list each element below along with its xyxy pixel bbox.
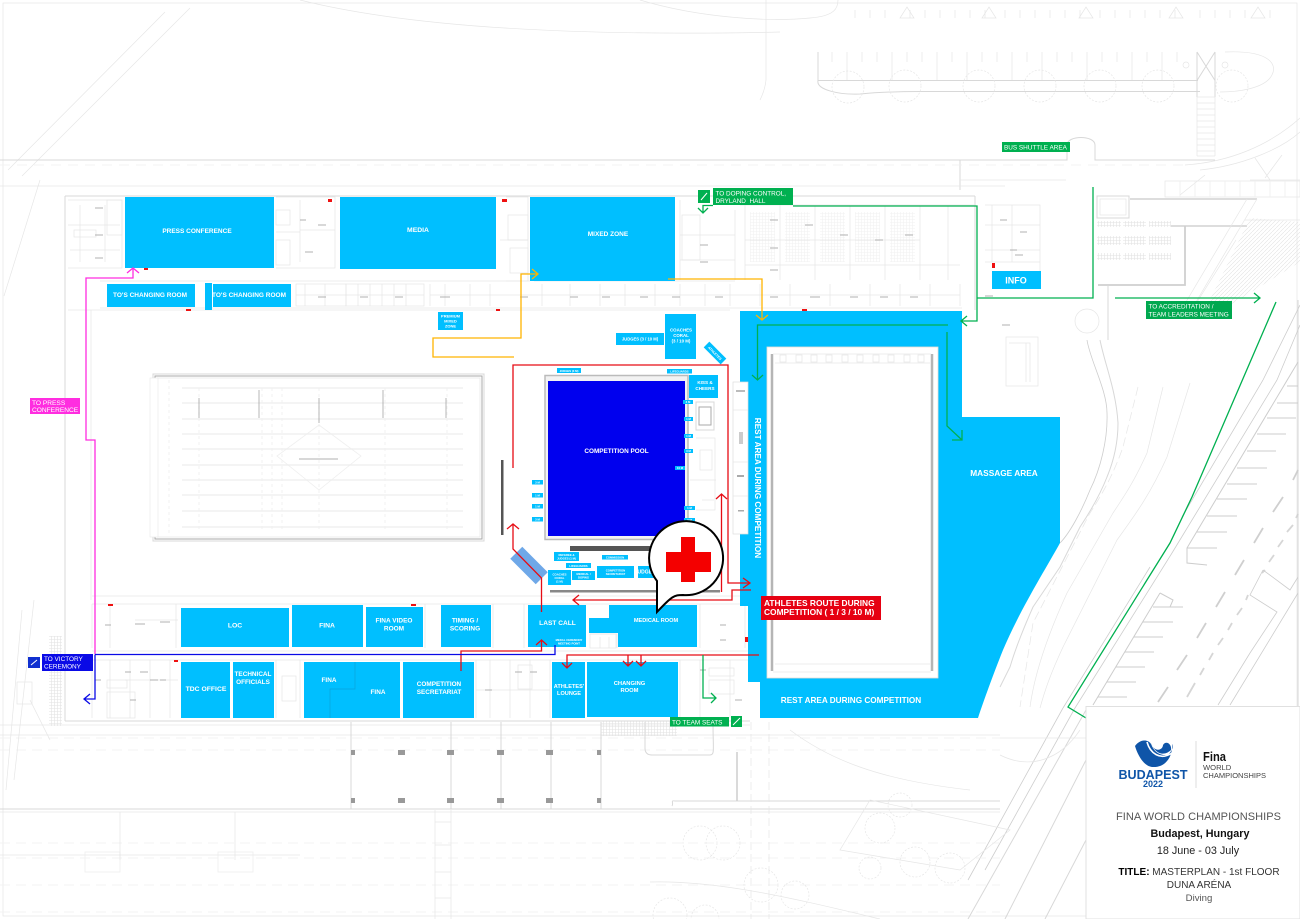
panel: title block [1086,706,1300,919]
room: premium mixed zone: PREMIUM [441,314,461,318]
room: FINA lower (two rooms): FINA [322,677,337,684]
small tags around the pool: CORAL [555,576,565,580]
callout: first aid marker [649,521,723,612]
room: FINA lower (two rooms) [304,662,400,718]
right side buildings [1097,196,1129,218]
room: TO's changing room 2: TO'S CHANGING ROOM [212,292,286,299]
label: to press conference [30,398,80,414]
room: media [340,197,496,269]
room: press conference [125,197,274,268]
room: coaches coral [665,314,696,359]
label: to press conference: TO PRESS [32,400,66,407]
small tags around the pool: 1 M [686,417,691,421]
label: to doping control: DRYLAND HALL [716,198,766,205]
room: kiss and cheers [689,375,718,398]
room: judges 3/10 m: JUDGES (3 / 10 M) [622,336,659,342]
small tags around the pool: 3 M [535,480,540,484]
room: athletes' lounge: ATHLETES' [554,684,585,690]
label: to team seats [670,716,742,727]
label: bus shuttle area: BUS SHUTTLE AREA [1004,144,1068,152]
panel: rest area during competition and massage area [740,311,1060,718]
label: to doping control: TO DOPING CONTROL, [716,190,786,198]
icon: FINA World Championships wordmark [1203,749,1266,780]
tiny room labels [95,208,1027,700]
panel: title block: 18 June - 03 July [1157,845,1240,857]
label: to victory ceremony: CEREMONY [44,664,82,670]
icon: red cross [666,537,711,582]
small tags around the pool: COMMISSION [606,556,624,560]
room: FINA upper [292,605,363,647]
small tags around the pool: DOPING [578,576,589,580]
small tags around the pool: 1 M [535,494,540,498]
room: last call [528,605,586,647]
label: to team seats: TO TEAM SEATS [672,720,722,726]
room: coaches coral: CORAL [673,333,689,338]
diagonal blue mat [510,547,548,584]
route: green doping and rest routes [698,187,1276,718]
small tags around the pool: LIFEGUARDS [670,369,689,373]
white athletes hall inside rest area [767,347,938,678]
room: mixed zone [530,197,675,281]
room: athletes' lounge: LOUNGE [557,691,581,697]
small tags around the pool: 1 M [687,506,692,510]
room: TO's changing room 1: TO'S CHANGING ROOM [113,292,187,299]
room: mixed zone: MIXED ZONE [588,231,629,238]
service block beside pool [733,382,748,534]
label: to doping control [698,188,793,205]
label: rest area vertical: REST AREA DURING COMPETITION [753,418,762,558]
label: to accreditation [1146,301,1232,319]
car park bays [1093,362,1298,705]
logo divider [1196,741,1197,788]
small tags around the pool: 10 M [677,466,684,470]
room: media: MEDIA [407,227,429,234]
building perimeter [65,196,975,721]
room: premium mixed zone: ZONE [445,324,456,328]
label: to accreditation: TO ACCREDITATION / [1148,304,1214,310]
room: medical room: MEDICAL ROOM [634,618,679,624]
road below the title block area [968,708,1075,880]
label: to accreditation: TEAM LEADERS MEETING [1148,312,1229,318]
room: competition secretariat: COMPETITION [417,681,462,688]
small tags around the pool: 3 M [687,518,692,522]
icon: FINA World Championships wordmark: WORLD [1203,763,1232,772]
small tags around the pool: JUDGES (3 M) [560,369,578,373]
room: timing / scoring: TIMING / [452,618,478,624]
label: to victory ceremony: TO VICTORY [44,656,83,663]
room: premium mixed zone: MIXED [444,318,457,324]
room: TO's changing room 2 [205,283,291,310]
route: red athletes route [461,365,759,671]
room: technical officials: TECHNICAL [235,671,272,678]
south row details [92,604,745,718]
pool side benches [501,460,720,592]
small tags around the pool: COMPETITION [606,568,625,572]
route: blue victory ceremony route [84,645,555,704]
route: magenta press conference route [86,268,139,654]
panel: title block: TITLE: MASTERPLAN - 1st FLOOR [1118,867,1280,878]
room: FINA video room: ROOM [384,626,404,632]
west offices [68,197,528,281]
room: rotated tag [704,342,726,364]
small tags around the pool: 3 M [686,400,691,404]
room: kiss and cheers: KISS & [697,380,713,385]
title text: FINA WORLD CHAMPIONSHIPS [1116,811,1281,823]
label: massage area: MASSAGE AREA [970,468,1038,478]
icon: FINA World Championships wordmark: CHAMPIONSHIPS [1203,771,1266,780]
room: judges 3/10 m [616,333,664,345]
small tags around the pool: MEDICAL / [576,572,591,576]
room: last call: MEETING POINT [558,642,580,646]
small tags around the pool: COACHES [552,572,567,576]
room: athletes' lounge [552,662,585,718]
room: last call: LAST CALL [539,620,576,627]
label: athletes route: ATHLETES ROUTE DURING [764,598,875,608]
small tags around the pool: JUDGES (1 M) [557,556,576,560]
room: FINA upper: FINA [319,622,335,630]
room: TO's changing room 1 [107,284,195,307]
bottom outside [0,725,1086,812]
competition pool: COMPETITION POOL [584,448,649,455]
room: changing room: ROOM [620,688,639,694]
room: info [992,271,1041,289]
small tags around the pool: 1 M [535,504,540,508]
room: kiss and cheers: CHEERS [695,386,715,391]
small tags around the pool: LIFEGUARDS [569,564,588,568]
panel: training pool [150,374,484,541]
label: athletes route [761,596,881,620]
icon: Budapest 2022 logo: BUDAPEST [1118,768,1188,782]
room: TDC office [181,662,230,718]
panel: diving area details [690,402,716,510]
label: rest area horizontal: REST AREA DURING COMPETITION [781,696,921,705]
small tags around the pool [532,368,695,585]
room: LOC [181,608,289,647]
room: last call: MEDAL CEREMONY [556,638,583,642]
room: competition secretariat [403,662,474,718]
room: changing room: CHANGING [614,681,646,687]
panel: title block: Diving [1186,893,1212,904]
small tags around the pool: JUDGES [635,570,656,576]
room: technical officials [233,662,274,718]
room: timing / scoring: SCORING [450,626,480,632]
panel: title block: DUNA ARÉNA [1167,878,1232,891]
room: technical officials: OFFICIALS [236,679,271,686]
room: FINA video room [366,607,423,647]
room: FINA lower (two rooms): FINA [371,689,386,696]
small tags around the pool: 1 M [686,434,691,438]
label: athletes route: COMPETITION ( 1 / 3 / 10 M) [764,607,874,617]
small tags around the pool: 3 M [686,449,691,453]
room: coaches coral: COACHES [670,328,692,332]
room: rotated tag: ATHLETES [707,346,723,362]
competition pool [545,376,688,540]
label: to victory ceremony [28,654,93,671]
route: yellow mixed zone route [433,269,768,357]
room: medical room [589,605,697,647]
small tags around the pool: REFEREE & [558,553,575,557]
room: press conference: PRESS CONFERENCE [162,228,232,235]
room: TDC office: TDC OFFICE [186,686,227,693]
left exterior [6,600,50,790]
room: coaches coral: (3 / 10 M) [672,338,691,344]
decor roads [4,0,838,296]
small tags around the pool: 3 M [535,518,540,522]
small tags around the pool: SECRETARIAT [606,572,626,576]
room: info: INFO [1005,276,1027,286]
label: to press conference: CONFERENCE [32,407,79,414]
small tags around the pool: (1 M) [556,580,563,584]
top car park [818,52,1215,97]
room: LOC: LOC [228,622,242,630]
icon: Budapest 2022 logo [1118,740,1188,789]
room: premium mixed zone [438,312,463,330]
room: competition secretariat: SECRETARIAT [417,689,461,696]
panel: title block: Budapest, Hungary [1150,828,1250,840]
icon: Budapest 2022 logo: 2022 [1143,779,1163,789]
north-east offices [680,200,975,280]
room: changing room [587,662,678,717]
room: timing / scoring [441,605,491,647]
label: bus shuttle area [1002,142,1070,152]
red markers [108,199,995,662]
icon: FINA World Championships wordmark: Fina [1203,749,1227,764]
room: FINA video room: FINA VIDEO [376,618,412,624]
